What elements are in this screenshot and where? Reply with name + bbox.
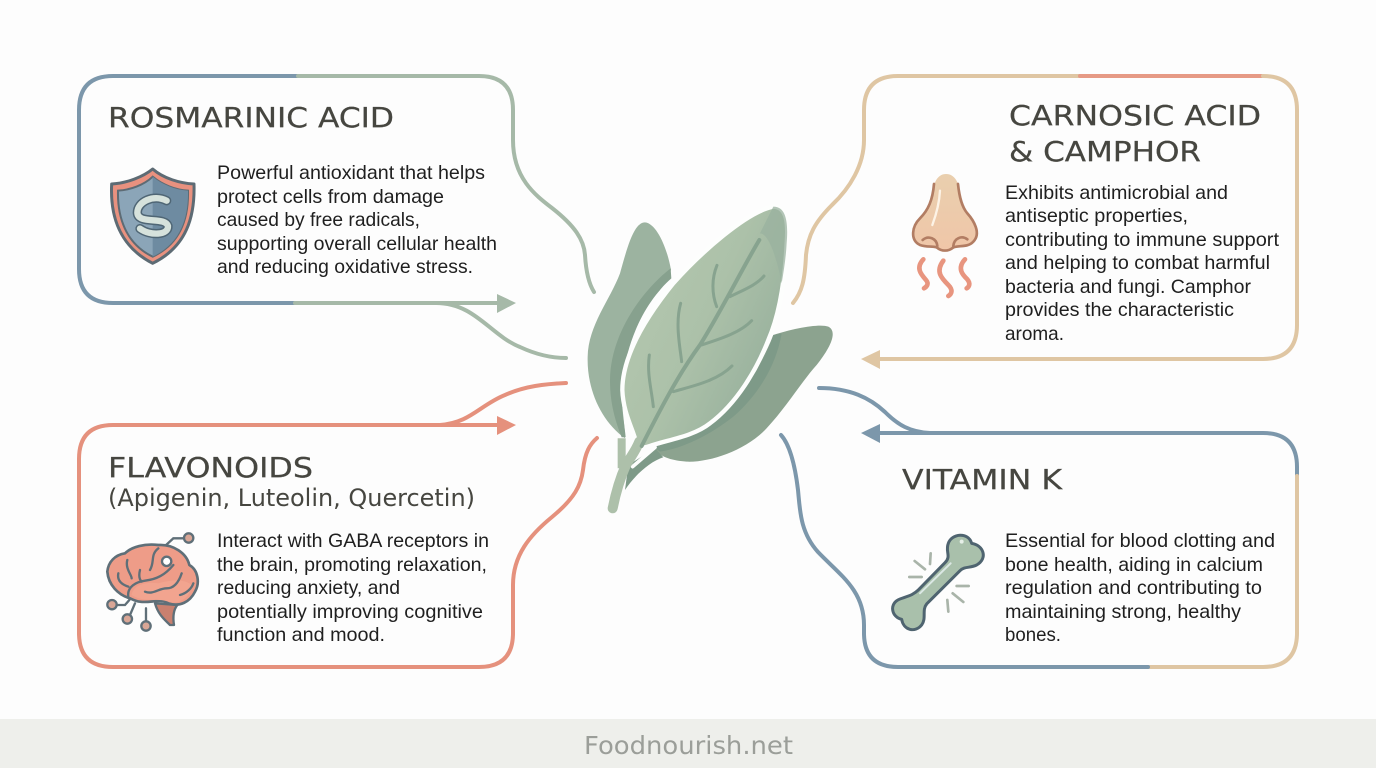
body text: regulation and contributing to <box>1005 577 1262 599</box>
heading: ROSMARINIC ACID <box>108 101 394 134</box>
leaf tip shade <box>760 207 787 283</box>
footer band <box>0 719 1376 768</box>
body text: and reducing oxidative stress. <box>217 256 473 278</box>
central sage leaf <box>588 207 833 508</box>
panel: carnosic acid and camphor <box>793 76 1297 369</box>
body text: the brain, promoting relaxation, <box>217 554 487 576</box>
footer text: Foodnourish.net <box>584 731 793 760</box>
icon: bone <box>893 535 983 630</box>
body text: protect cells from damage <box>217 186 444 208</box>
arrow head <box>497 416 516 435</box>
body text <box>1005 182 1280 345</box>
body text: potentially improving cognitive <box>217 601 483 623</box>
right leaf shadow <box>653 333 782 452</box>
heading: VITAMIN K <box>902 463 1063 496</box>
body text: Exhibits antimicrobial and <box>1005 182 1228 204</box>
card border <box>781 388 1297 667</box>
left leaf shadow <box>610 268 671 437</box>
panel: vitamin k <box>781 388 1297 667</box>
body text: and helping to combat harmful <box>1005 252 1270 274</box>
heading: FLAVONOIDS <box>108 451 313 484</box>
body text: provides the characteristic <box>1005 299 1234 321</box>
heading: & CAMPHOR <box>1009 135 1201 168</box>
arrow head <box>861 424 880 443</box>
body text: supporting overall cellular health <box>217 233 497 255</box>
panel: rosmarinic acid <box>79 76 594 358</box>
body text: contributing to immune support <box>1005 229 1280 251</box>
subheading: (Apigenin, Luteolin, Quercetin) <box>108 484 475 512</box>
card border <box>793 76 1297 359</box>
body text <box>217 162 497 278</box>
body text: Essential for blood clotting and <box>1005 530 1275 552</box>
body text <box>1005 530 1275 646</box>
body text: bone health, aiding in calcium <box>1005 554 1263 576</box>
body text: function and mood. <box>217 624 385 646</box>
body text: caused by free radicals, <box>217 209 420 231</box>
card border <box>79 383 597 667</box>
card border <box>79 76 594 358</box>
body text: bacteria and fungi. Camphor <box>1005 276 1251 298</box>
body text: Powerful antioxidant that helps <box>217 162 485 184</box>
body text: bones. <box>1005 624 1061 646</box>
heading: CARNOSIC ACID <box>1009 99 1261 132</box>
panel: flavonoids <box>79 383 597 667</box>
icon: brain <box>107 533 198 631</box>
stem gap <box>633 447 655 467</box>
icon: shield <box>111 169 194 263</box>
body text: aroma. <box>1005 323 1064 345</box>
body text: antiseptic properties, <box>1005 205 1188 227</box>
body text: reducing anxiety, and <box>217 577 400 599</box>
leaf veins <box>642 240 764 446</box>
body text: maintaining strong, healthy <box>1005 601 1241 623</box>
back left leaf <box>588 222 671 438</box>
heading <box>1009 99 1261 168</box>
front leaf <box>622 207 787 448</box>
stem <box>613 438 639 508</box>
lower stem shadow <box>625 448 663 490</box>
body text: Interact with GABA receptors in <box>217 530 489 552</box>
right leaf <box>653 326 833 462</box>
icon: nose with scent <box>913 174 978 296</box>
arrow head <box>861 350 880 369</box>
arrow head <box>497 294 516 313</box>
body text <box>217 530 489 646</box>
